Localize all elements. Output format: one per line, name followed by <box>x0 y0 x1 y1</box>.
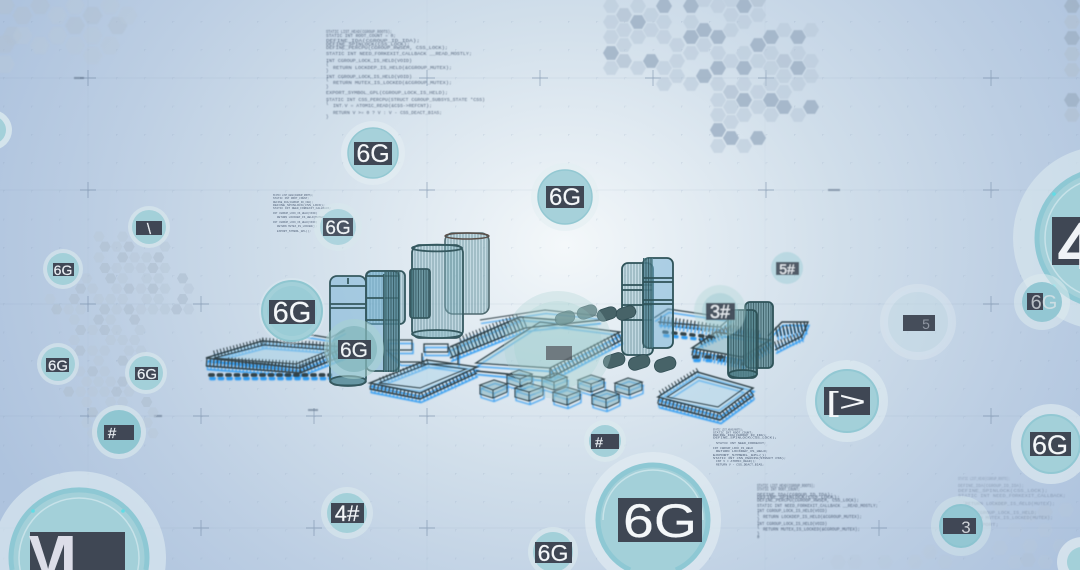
code block: left of city: INT CGROUP_LOCK_IS_HELD(VOID) <box>273 211 317 215</box>
6G glass badge over city centre <box>504 291 612 399</box>
code block: bottom centre right: DEFINE_PERCPU(CGROUP_RWSEM, CSS_LOCK); <box>757 498 859 504</box>
code block: top centre: INT CGROUP_LOCK_IS_HELD(VOID) <box>326 75 412 80</box>
code block: left of city: INT CGROUP_LOCK_IS_HELD(VOID) <box>273 220 317 224</box>
code block: bottom centre right: # <box>757 536 760 540</box>
code block: lower middle right: STATIC INT CSS_PERCPU(STRUCT CSS); <box>713 456 786 460</box>
icon: terminal prompt badge <box>806 360 888 442</box>
code block: top centre <box>326 30 485 120</box>
code block: lower middle right: DEFINE_SPINLOCK(CSS_LOCK); <box>713 436 777 440</box>
code block: bottom centre right: INT CGROUP_LOCK_IS_HELD(VOID) <box>757 509 827 514</box>
code block: faint right: RETURN MUTEX_IS_LOCKED(MUTEX); <box>965 516 1053 521</box>
code block: lower middle right: DEFINE_IDA(CGROUP_ID_IDA); <box>713 433 767 437</box>
code block: bottom centre right: DEFINE_SPINLOCK(CSS_LOCK); <box>757 496 840 500</box>
icon: 3 badge bottom right <box>931 496 991 556</box>
code block: top centre: DEFINE_SPINLOCK(CSS_LOCK); <box>326 42 410 48</box>
code block: top centre: INT CGROUP_LOCK_IS_HELD(VOID) <box>326 59 412 64</box>
code block: lower middle right: RETURN V - CSS_DEACT_BIAS; <box>716 464 764 466</box>
code block: left of city: DEFINE_SPINLOCK(CSS_LOCK); <box>273 203 325 207</box>
icon: 6G badge near code block: 6G <box>325 218 351 239</box>
cylinder towers: right cluster <box>622 258 773 378</box>
icon: faded 6G badge right: 6G <box>1031 292 1057 314</box>
icon: faded 6G badge right <box>1014 274 1070 330</box>
code block: top centre: DEFINE_PERCPU(CGROUP_RWSEM, CSS_LOCK); <box>326 46 448 51</box>
icon: faded 5 badge right <box>884 288 952 356</box>
code block: faint right: DEFINE_SPINLOCK(CSS_LOCK); <box>958 489 1048 494</box>
icon: 6G badge on tower: 6G <box>340 339 368 362</box>
code block: left of city: EXPORT_SYMBOL_GPL(); <box>277 229 311 233</box>
code block: faint right: STATIC INT NEED_FORKEXIT_CALLBACK; <box>958 494 1066 499</box>
code block: top centre: INT V = ATOMIC_READ(&CSS->REFCNT); <box>333 104 432 109</box>
code block: top centre: { <box>326 62 329 68</box>
code block: lower middle right: STATIC INT ROOT_COUNT; <box>713 432 753 434</box>
icon: 3 badge bottom right: 3 <box>961 518 971 537</box>
code block: faint right <box>958 477 1066 528</box>
code block: bottom centre right: RETURN MUTEX_IS_LOCKED(&CGROUP_MUTEX); <box>763 528 860 532</box>
code block: faint right: EXPORT; <box>975 523 999 528</box>
code block: bottom centre right: STATIC LIST_HEAD(CGROUP_ROOTS); <box>757 484 815 489</box>
code block: bottom centre right: STATIC INT ROOT_COUNT; <box>757 488 800 492</box>
code block: bottom centre right: STATIC INT NEED_FORKEXIT_CALLBACK __READ_MOSTLY; <box>757 504 878 509</box>
hexagon cluster: bottom right <box>830 498 1074 569</box>
icon: 6G small badge left upper: 6G <box>54 262 72 278</box>
icon: 3# badge over city <box>694 285 746 337</box>
code block: top centre: } <box>326 85 329 90</box>
icon: hash badge left: # <box>108 425 117 442</box>
code block: bottom centre right: DEFINE_IDA(CGROUP_ID_IDA); <box>757 493 833 498</box>
code block: lower middle right: RETURN LOCKDEP_IS_HELD; <box>716 450 768 453</box>
icon: 5# badge <box>771 252 803 284</box>
icon: hash badge left <box>92 405 146 459</box>
icon: 6G badge right: 6G <box>1032 430 1068 460</box>
icon: faded 5 badge right: 5 <box>922 316 930 332</box>
icon: 6G small badge left lower <box>37 343 79 385</box>
icon: 6G badge upper centre: 6G <box>549 184 581 211</box>
code block: left of city: STATIC LIST_HEAD(CGROUP_ROOTS); <box>273 193 313 197</box>
code block: bottom centre right: { <box>757 512 760 517</box>
icon: large 6G badge bottom centre <box>585 452 721 570</box>
code block: bottom centre right: } <box>757 532 760 537</box>
code block: bottom centre right <box>757 484 878 540</box>
icon: 6G badge on left tower <box>259 278 325 344</box>
code block: faint right: INT CGROUP_LOCK_IS_HELD; <box>965 511 1037 516</box>
code block: left of city: RETURN LOCKDEP_IS_HELD(MUTEX); <box>277 215 327 219</box>
code block: top centre: { <box>326 78 329 82</box>
icon: 6G badge upper centre <box>531 163 599 231</box>
wireframe circuit-board city <box>206 233 809 424</box>
code block: top centre: RETURN V >= 0 ? V : V - CSS_DEACT_BIAS; <box>333 111 442 116</box>
icon: 6G badge bottom <box>528 527 578 570</box>
code block: left of city: RETURN MUTEX_IS_LOCKED(); <box>277 224 317 228</box>
code block: left of city: STATIC INT ROOT_COUNT; <box>273 197 309 200</box>
code block: left of city <box>273 193 331 233</box>
code block: bottom centre right: RETURN LOCKDEP_IS_HELD(&CGROUP_MUTEX); <box>763 515 862 520</box>
code block: bottom centre right: { <box>757 525 760 530</box>
code block: lower middle right: INT V = ATOMIC_READ(); <box>716 459 756 463</box>
code block: faint right: RETURN LOCKDEP_IS_HELD(MUTEX); <box>965 502 1055 507</box>
wireframe platforms and boxes <box>206 309 808 420</box>
cylinder towers: centre cluster <box>330 233 489 386</box>
code block: faint right: DEFINE_IDA(CGROUP_ID_IDA); <box>958 484 1024 489</box>
icon: terminal prompt badge: [> <box>826 386 866 417</box>
code block: top centre: STATIC INT CSS_PERCPU(STRUCT CGROUP_SUBSYS_STATE *CSS) <box>326 98 485 103</box>
icon: 5# badge: 5# <box>779 261 795 277</box>
code block: top centre: } <box>326 115 329 120</box>
icon: 6G badge near code block <box>314 203 362 251</box>
icon: large 4 badge right edge <box>1013 146 1080 330</box>
capsule tanks <box>554 303 678 374</box>
code block: bottom centre right: } <box>757 518 760 522</box>
icon: large 6G badge bottom centre: 6G <box>623 494 697 547</box>
code block: lower middle right: EXPORT_SYMBOL_GPL(); <box>713 453 767 457</box>
icon: 6G badge bottom: 6G <box>538 540 568 566</box>
icon: 6G badge on tower <box>324 319 384 379</box>
code block: faint right: STATIC LIST_HEAD(CGROUP_ROOTS); <box>958 477 1010 482</box>
hexagon cluster: top right edge <box>1064 0 1080 122</box>
code block: lower middle right <box>713 428 786 466</box>
hexagon cluster: top left <box>0 0 138 73</box>
code block: top centre: } <box>326 69 329 74</box>
code block: left of city: STATIC INT NEED_FORKEXIT_CALLBACK; <box>273 207 331 210</box>
icon: backslash badge <box>128 206 170 248</box>
blue shadow of the wireframe <box>207 312 809 424</box>
code block: top centre: STATIC INT ROOT_COUNT = 0; <box>326 34 396 39</box>
code block: lower middle right: STATIC LIST_HEAD(ROOTS); <box>713 428 743 432</box>
icon: 6G badge on left tower: 6G <box>273 297 311 329</box>
icon: 6G small badge left right <box>125 352 167 394</box>
code block: lower middle right: INT CGROUP_LOCK_IS_HELD <box>713 447 753 450</box>
code block: lower middle right: STATIC INT NEED_FORKEXIT; <box>716 442 766 445</box>
code block: left of city: DEFINE_IDA(CGROUP_ID_IDA); <box>273 200 313 204</box>
code block: top centre: { <box>326 101 329 106</box>
icon: 6G badge top: 6G <box>356 140 390 168</box>
icon: hash badge centre <box>584 420 626 462</box>
icon: hash badge centre: # <box>595 434 603 450</box>
icon: 6G small badge left upper <box>43 249 83 289</box>
icon: partial badge left edge <box>0 110 12 150</box>
code block: top centre: STATIC LIST_HEAD(CGROUP_ROOTS); <box>326 30 392 35</box>
icon: 4# badge <box>321 487 373 539</box>
code block: top centre: DEFINE_IDA(CGROUP_ID_IDA); <box>326 39 420 44</box>
code block: top centre: RETURN MUTEX_IS_LOCKED(&CGROUP_MUTEX); <box>333 81 452 86</box>
code block: top centre: RETURN LOCKDEP_IS_HELD(&CGROUP_MUTEX); <box>333 66 452 71</box>
icon: 6G small badge left right: 6G <box>137 366 157 383</box>
code block: bottom centre right: INT CGROUP_LOCK_IS_HELD(VOID) <box>757 522 827 527</box>
icon: 4# badge: 4# <box>335 501 360 526</box>
code block: top centre: EXPORT_SYMBOL_GPL(CGROUP_LOCK_IS_HELD); <box>326 91 448 96</box>
icon: 6G badge top <box>341 121 405 185</box>
icon: 3# badge over city: 3# <box>710 302 730 322</box>
hexagon cluster: top right <box>603 0 819 153</box>
icon: large VI badge bottom left <box>0 471 166 570</box>
code block: top centre: STATIC INT NEED_FORKEXIT_CALLBACK __READ_MOSTLY; <box>326 52 472 57</box>
icon: partial badge bottom right corner <box>1057 537 1080 570</box>
icon: 6G badge right <box>1011 404 1080 484</box>
icon: backslash badge: \ <box>147 221 152 238</box>
hexagon cluster: left <box>44 232 194 438</box>
icon: 6G small badge left lower: 6G <box>48 358 68 374</box>
